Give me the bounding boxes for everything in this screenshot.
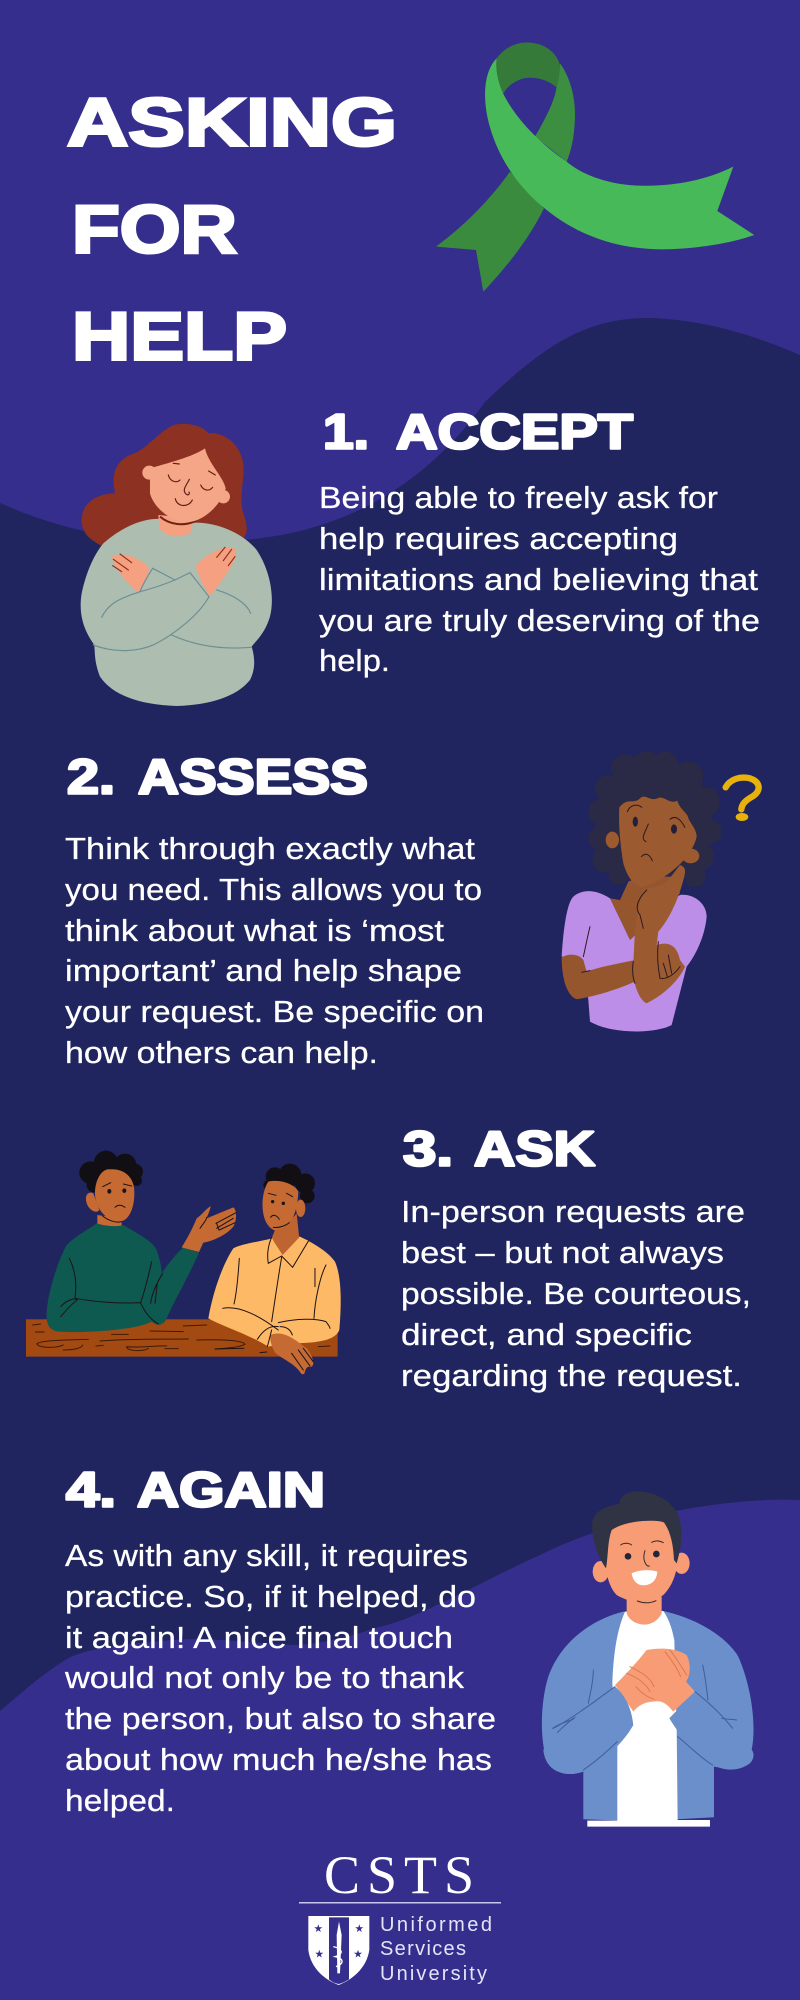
logo text: Uniformed Services University: Uniformed [380, 1914, 492, 1936]
heading: 4. AGAIN: AGAIN [137, 1464, 325, 1518]
heading: 4. AGAIN: 4. [66, 1464, 116, 1518]
logo text: Uniformed Services University: University [380, 1963, 487, 1985]
icon: university shield: ★ [314, 1922, 323, 1935]
icon: university shield: ★ [315, 1948, 324, 1961]
heading: 1. ACCEPT [323, 406, 633, 460]
text block: ask: regarding the request. [401, 1359, 742, 1393]
table [26, 1319, 338, 1357]
illustration: woman hugging herself [81, 424, 272, 706]
text block: assess: important’ and help shape [65, 954, 462, 988]
panel: step 3 ask [26, 1122, 751, 1393]
background: dark navy wave [0, 318, 800, 1711]
text block: again: the person, but also to share [65, 1702, 496, 1736]
text block: assess [65, 832, 484, 1070]
logo text: Uniformed Services University: Services [380, 1938, 466, 1960]
logo: CSTS Uniformed Services University [299, 1845, 501, 1985]
heading: 3. ASK: ASK [474, 1122, 595, 1176]
title [67, 84, 397, 374]
text block: again: practice. So, if it helped, do [65, 1580, 476, 1614]
icon: university shield: ★ [355, 1922, 364, 1935]
text block: assess: think about what is ‘most [65, 914, 445, 948]
heading: 2. ASSESS: 2. [67, 750, 115, 804]
text block: assess: you need. This allows you to [65, 873, 482, 907]
title: HELP [72, 298, 287, 374]
logo wordmark: CSTS: CSTS [324, 1845, 474, 1905]
title: FOR [72, 192, 237, 268]
panel: step 4 again [64, 1464, 754, 1827]
icon: university shield: ★ [353, 1948, 363, 1961]
panel: step 1 accept [81, 406, 760, 706]
text block: assess: how others can help. [65, 1036, 378, 1070]
text block: ask: In-person requests are [401, 1195, 745, 1229]
heading: 2. ASSESS: ASSESS [138, 750, 368, 804]
heading: 2. ASSESS [67, 750, 368, 804]
text block: ask: best – but not always [401, 1236, 724, 1270]
text block: assess: Think through exactly what [65, 832, 476, 866]
illustration: thinking woman [562, 751, 759, 1031]
text block: assess: your request. Be specific on [65, 995, 484, 1029]
text block: again: would not only be to thank [64, 1661, 465, 1695]
title: ASKING [67, 84, 397, 160]
text block: again: helped. [65, 1784, 175, 1818]
text block: accept: you are truly deserving of the [319, 604, 760, 638]
heading: 1. ACCEPT: ACCEPT [396, 406, 633, 460]
text block: again: As with any skill, it requires [65, 1539, 468, 1573]
text block: again: about how much he/she has [65, 1743, 492, 1777]
text block: accept: limitations and believing that [319, 563, 759, 597]
text block: accept [319, 481, 760, 678]
text block: again: it again! A nice final touch [65, 1621, 453, 1655]
text block: again [64, 1539, 496, 1818]
icon: green awareness ribbon [436, 42, 754, 292]
heading: 1. ACCEPT: 1. [323, 406, 369, 460]
heading: 4. AGAIN [66, 1464, 325, 1518]
text block: accept: Being able to freely ask for [319, 481, 718, 515]
text block: ask: direct, and specific [401, 1318, 692, 1352]
panel: step 2 assess [65, 750, 759, 1070]
logo text: Uniformed Services University [380, 1914, 492, 1985]
heading: 3. ASK: 3. [403, 1122, 453, 1176]
text block: ask [401, 1195, 751, 1393]
icon: question mark [726, 778, 759, 821]
heading: 3. ASK [403, 1122, 595, 1176]
text block: accept: help. [319, 644, 390, 678]
illustration: two people talking at a table [26, 1151, 341, 1374]
illustration: grateful man [542, 1491, 754, 1827]
text block: accept: help requires accepting [319, 522, 678, 556]
text block: ask: possible. Be courteous, [401, 1277, 751, 1311]
icon: university shield [308, 1916, 369, 1985]
